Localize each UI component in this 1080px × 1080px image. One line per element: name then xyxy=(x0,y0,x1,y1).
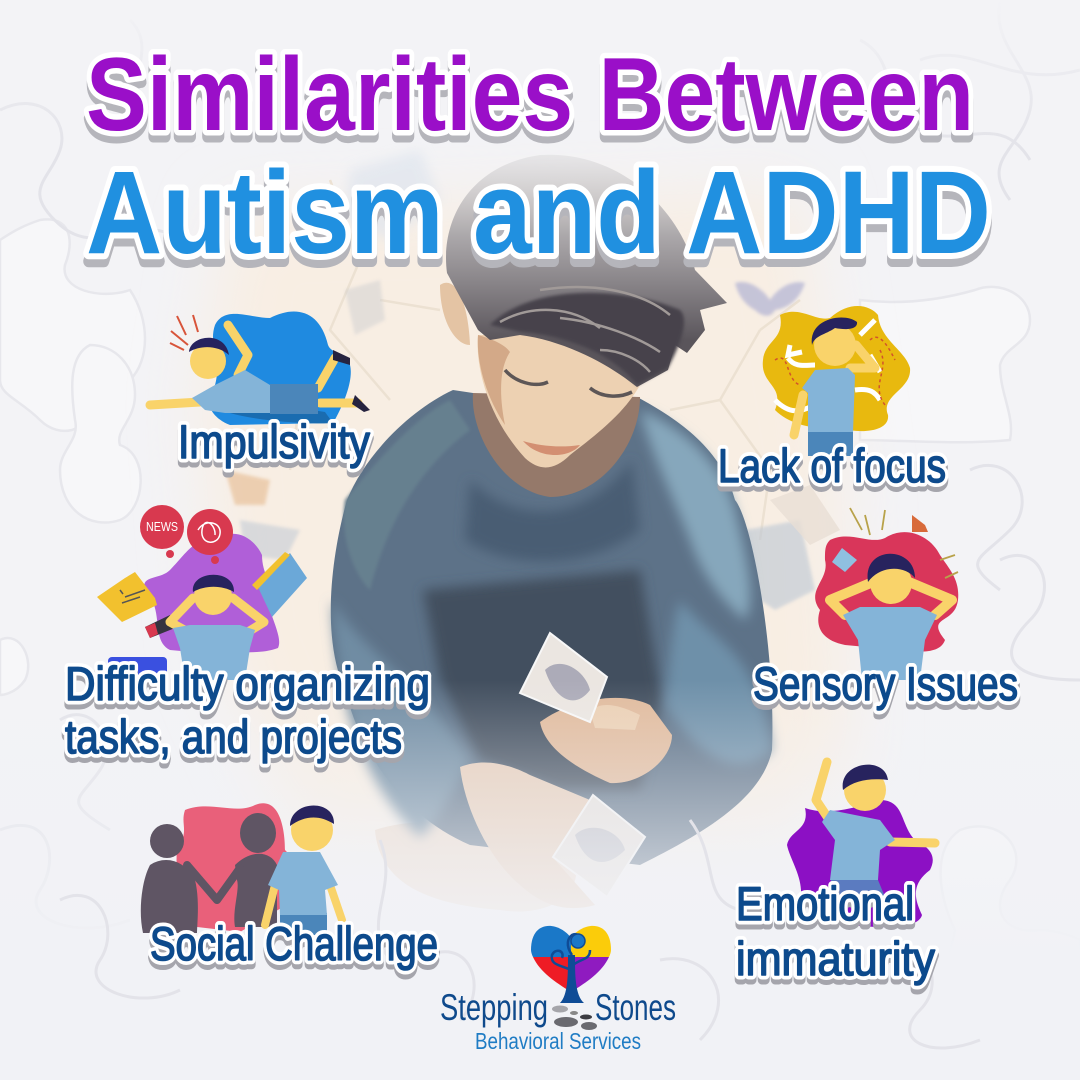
label: Difficulty organizing tasks, and projects: tasks, and projects xyxy=(65,715,402,768)
label: Difficulty organizing tasks, and projects: Difficulty organizing xyxy=(65,657,430,710)
news bubble text: NEWS xyxy=(146,519,178,534)
icon: emotional immaturity, boy raising arm xyxy=(787,762,935,927)
ear xyxy=(440,283,470,345)
icon: impulsivity, boy lying down xyxy=(150,311,370,425)
label: Lack of focus: Lack of focus xyxy=(718,444,946,497)
lower puzzle card xyxy=(553,795,645,897)
hair xyxy=(446,155,727,387)
logo tagline: Behavioral Services xyxy=(475,1028,641,1054)
sweater shading xyxy=(423,570,662,790)
title line 1: Similarities Between xyxy=(86,44,974,160)
icon: difficulty organizing, boy with news and documents xyxy=(97,505,307,680)
logo stones xyxy=(552,1006,597,1030)
logo: Stepping Stones Behavioral Services xyxy=(440,926,676,1054)
face shading xyxy=(478,335,510,425)
neck xyxy=(473,393,640,497)
label: Impulsivity: Impulsivity xyxy=(178,415,370,468)
label: Emotional immaturity: immaturity xyxy=(736,932,935,985)
lower hand xyxy=(460,762,595,908)
mouth xyxy=(523,441,580,455)
logo wordmark: Stepping, Stones: Stepping xyxy=(440,987,548,1028)
title line 2: Autism and ADHD xyxy=(86,147,991,279)
title line 2: Autism and ADHD xyxy=(86,155,991,287)
label: Emotional immaturity: Emotional xyxy=(736,882,914,935)
sweater xyxy=(331,390,772,865)
hair fringe and strands xyxy=(490,293,684,385)
icon: lack of focus, boy with yellow blob xyxy=(763,306,910,456)
icon: social challenge, boy beside silhouettes xyxy=(141,803,342,935)
label: Difficulty organizing tasks, and projects: tasks, and projects xyxy=(65,710,402,763)
icon: puzzle heart with tree xyxy=(531,926,611,1003)
title line 1: Similarities Between xyxy=(86,37,974,153)
icon: sensory issues, boy covering ears xyxy=(815,508,958,680)
label: Lack of focus: Lack of focus xyxy=(718,439,946,492)
label: Emotional immaturity: Emotional xyxy=(736,877,914,930)
label: Emotional immaturity: immaturity xyxy=(736,937,935,990)
label: Sensory Issues: Sensory Issues xyxy=(753,662,1018,715)
upper hand xyxy=(540,698,672,783)
label: Impulsivity: Impulsivity xyxy=(178,420,370,473)
label: Emotional immaturity: Emotional xyxy=(736,877,914,930)
label: Social Challenge: Social Challenge xyxy=(150,922,438,975)
upper puzzle card xyxy=(520,633,607,722)
icon: butterfly xyxy=(735,282,805,316)
label: Lack of focus: Lack of focus xyxy=(718,439,946,492)
label: Social Challenge: Social Challenge xyxy=(150,917,438,970)
label: Difficulty organizing tasks, and projects: Difficulty organizing xyxy=(65,662,430,715)
label: Social Challenge: Social Challenge xyxy=(150,917,438,970)
label: Emotional immaturity: immaturity xyxy=(736,932,935,985)
label: Sensory Issues: Sensory Issues xyxy=(753,657,1018,710)
title xyxy=(86,37,991,287)
legs xyxy=(375,821,576,912)
logo wordmark: Stepping, Stones: Stones xyxy=(595,987,676,1028)
label: Difficulty organizing tasks, and projects: tasks, and projects xyxy=(65,710,402,763)
logo wordmark: Stepping, Stones xyxy=(440,987,676,1028)
face xyxy=(478,334,640,467)
label: Emotional immaturity xyxy=(736,877,935,990)
label: Sensory Issues: Sensory Issues xyxy=(753,657,1018,710)
label: Difficulty organizing tasks, and projects: Difficulty organizing xyxy=(65,657,430,710)
label: Difficulty organizing tasks, and projects xyxy=(65,657,430,768)
central boy illustration xyxy=(200,150,850,912)
label: Impulsivity: Impulsivity xyxy=(178,415,370,468)
cracked backdrop xyxy=(200,150,850,840)
